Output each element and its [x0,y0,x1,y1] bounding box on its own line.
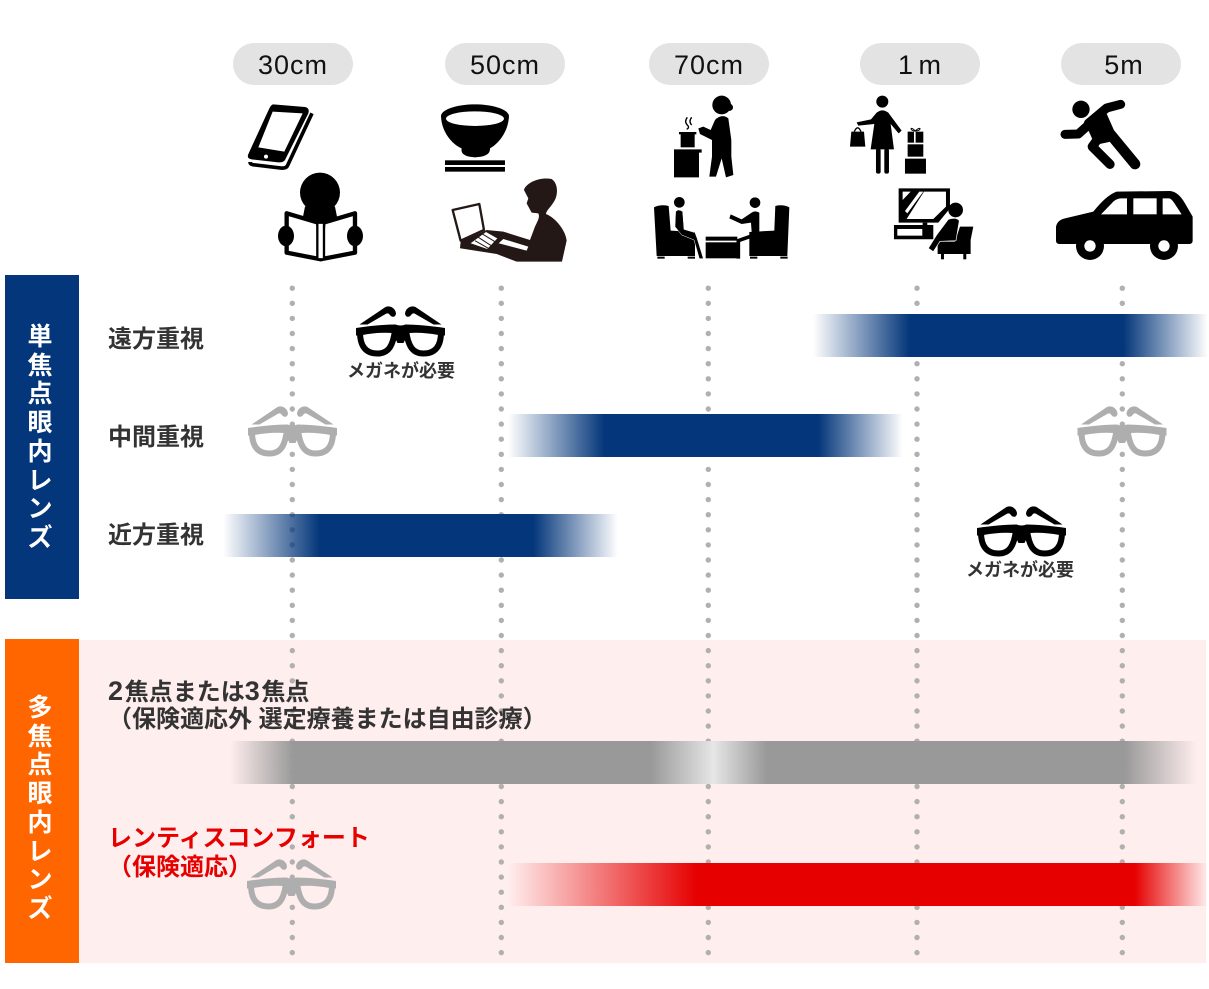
distance pill: 70cm [649,43,769,85]
heading: single-focus intraocular lens: 焦 [27,352,52,380]
icon: rice bowl and chopsticks [441,104,509,172]
distance pill: 5m [1061,43,1181,85]
icon: smartphone [248,104,312,168]
icon: gray glasses at 5m [1078,406,1166,454]
distance pill: 30cm [233,43,353,85]
icon: person shopping with gifts [850,96,926,174]
caption: glasses needed (far): メガネが必要 [966,560,1074,580]
panel: single-focus label block [5,275,79,599]
icon: person reading a book [278,173,363,259]
distance pill: 50cm [445,43,565,85]
row note: covered by insurance: （保険適応） [108,854,252,881]
heading: multifocal intraocular lens [27,694,52,923]
heading: multifocal intraocular lens: ン [27,866,52,894]
icon: gray glasses at 30cm [248,406,337,454]
heading: multifocal intraocular lens: レ [27,838,52,866]
row note: not covered by insurance: （保険適応外 選定療養または自由診療） [108,706,547,733]
heading: single-focus intraocular lens: 眼 [27,409,52,437]
distance pill: 1m [860,43,980,85]
row label: near focus: 近方重視 [108,522,204,549]
panel: multifocal label block [5,639,79,963]
panel: multifocal background [79,640,1206,963]
caption: glasses needed (near): メガネが必要 [347,361,455,381]
heading: multifocal intraocular lens: 眼 [27,780,52,808]
icon: person watching television [894,188,973,259]
heading: multifocal intraocular lens: ズ [27,895,52,923]
heading: multifocal intraocular lens: 多 [27,694,52,722]
bar: Lentis Comfort range [508,863,1208,906]
row label: bifocal or trifocal: 2焦点または3焦点 [108,676,309,706]
row label: far focus: 遠方重視 [108,326,204,353]
icon: person using a laptop [453,178,567,262]
icon: car [1056,191,1193,260]
heading: single-focus intraocular lens: ン [27,495,52,523]
heading: multifocal intraocular lens: 焦 [27,723,52,751]
distance pill: 1m: 1 m [898,50,942,80]
distance pill: 30cm: 30cm [258,50,328,80]
bar: intermediate focus range [508,414,903,457]
icon: two people talking on sofas [654,197,789,259]
distance pill: 70cm: 70cm [674,50,744,80]
icon: black glasses, far focus needs glasses at near distance [356,306,445,354]
heading: single-focus intraocular lens: レ [27,467,52,495]
heading: single-focus intraocular lens: 内 [27,438,52,466]
bar: near focus range [223,514,618,557]
bar: bifocal or trifocal range [230,741,1197,784]
icon: person cooking [674,96,733,177]
bar: far focus range [813,314,1208,357]
distance pill: 5m: 5m [1104,50,1144,80]
icon: gray glasses for Lentis Comfort [247,859,336,906]
row label: intermediate focus: 中間重視 [108,424,204,451]
heading: single-focus intraocular lens: 点 [27,380,52,408]
heading: single-focus intraocular lens [27,323,52,552]
distance pill: 50cm: 50cm [470,50,540,80]
heading: multifocal intraocular lens: 内 [27,809,52,837]
heading: single-focus intraocular lens: ズ [27,524,52,552]
heading: multifocal intraocular lens: 点 [27,751,52,779]
heading: single-focus intraocular lens: 単 [27,323,52,351]
icon: black glasses, near focus needs glasses at distance [977,506,1066,554]
icon: running person [1065,101,1135,164]
row label: Lentis Comfort: レンティスコンフォート [108,825,370,852]
